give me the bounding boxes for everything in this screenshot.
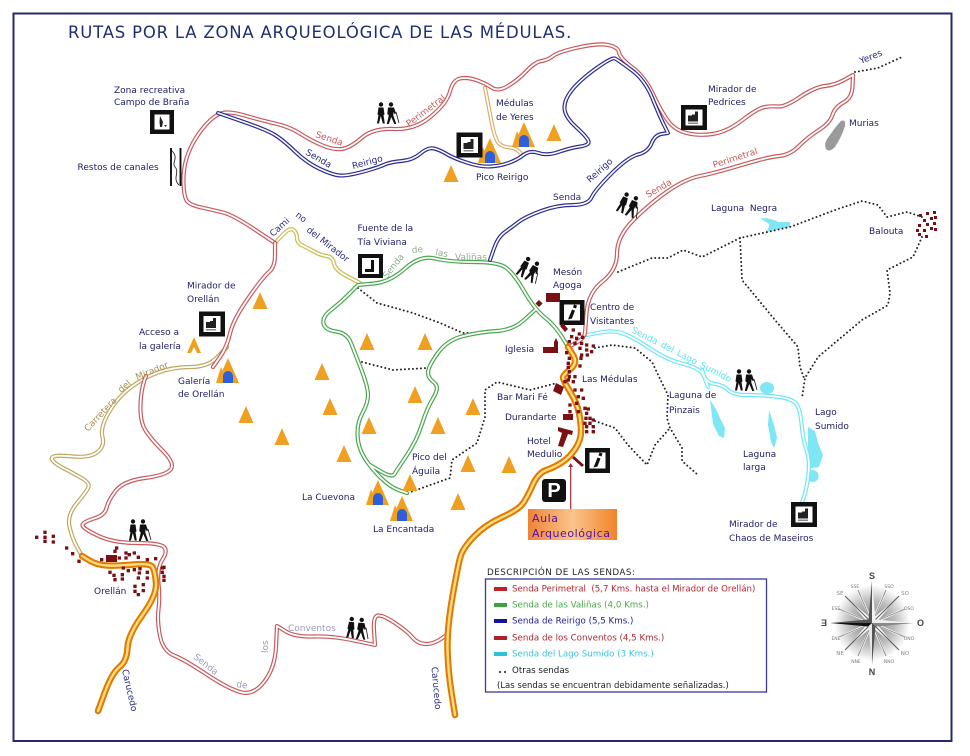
place labels: Balouta <box>869 227 903 237</box>
place labels: de Yeres <box>496 113 534 123</box>
place labels: Pico Reirigo <box>476 173 529 183</box>
place labels: Laguna Negra <box>711 204 777 214</box>
trail: Medulas de Yeres path <box>485 88 522 155</box>
trail labels: Conventos <box>288 624 336 634</box>
place labels: Orellán <box>94 587 126 597</box>
icons: hikers <box>129 102 757 640</box>
trail labels: Senda <box>553 193 581 203</box>
icon: canal remains <box>171 148 180 186</box>
callout: Aula Arqueológica: Aula <box>532 512 558 525</box>
icon: recreation area <box>150 110 174 134</box>
legend heading: DESCRIPCIÓN DE LAS SENDAS: <box>487 566 635 578</box>
place labels: Pico del <box>412 453 447 463</box>
place labels: Las Médulas <box>582 374 638 385</box>
icon: information, visitor centre <box>560 300 584 325</box>
trail labels: Carucedo <box>119 668 139 713</box>
trail labels: Mirador <box>134 361 170 383</box>
place labels: Orellán <box>187 295 219 305</box>
trail labels: de <box>411 245 424 256</box>
compass rose: NNE <box>851 659 861 665</box>
icon: mirador Pico Reirigo <box>456 132 482 158</box>
legend box <box>486 579 766 692</box>
place labels: Pedrices <box>708 98 746 108</box>
trail labels: Valiñas <box>455 253 487 263</box>
icon: mirador de Orellán <box>199 312 225 336</box>
place labels: Hotel <box>527 437 551 447</box>
compass rose: ENE <box>831 636 841 642</box>
trail: Senda de las Valiñas <box>323 258 568 493</box>
compass rose <box>821 571 924 677</box>
trail labels: los <box>261 640 271 653</box>
trail: Senda de Reirigo <box>218 58 668 260</box>
place labels: Acceso a <box>139 328 179 338</box>
place labels: Pinzais <box>669 406 700 416</box>
trail labels: Senda <box>381 252 407 281</box>
village dots: Orellán <box>35 531 166 596</box>
place labels: Mirador de <box>729 520 778 530</box>
galleries <box>216 122 535 521</box>
trail labels: Carretera <box>83 396 119 434</box>
road to Carucedo from Orellán <box>82 556 156 711</box>
legend box: Otras sendas <box>512 666 570 676</box>
trail labels: Senda del Lago Sumido <box>630 326 733 385</box>
icon: parking <box>542 479 566 502</box>
trail labels: del Mirador <box>304 225 351 265</box>
place labels: Iglesia <box>505 345 534 355</box>
trail: Senda del Lago Sumido <box>587 331 809 503</box>
compass rose: SO <box>901 591 910 597</box>
trail labels: del <box>117 379 133 395</box>
place labels: Mirador de <box>187 282 236 292</box>
callout: Aula Arqueológica <box>528 509 617 540</box>
place labels: Visitantes <box>590 317 634 327</box>
place labels: Medulio <box>527 450 563 460</box>
arrow: Aula Arqueológica pointer <box>568 463 573 509</box>
place labels: Lago <box>815 408 837 418</box>
compass rose: ESE <box>832 606 840 612</box>
buildings <box>106 293 584 562</box>
place labels: Águila <box>412 465 440 477</box>
legend box: Senda de las Valiñas (4,0 Kms.) <box>512 600 649 610</box>
place labels: Laguna <box>743 450 776 460</box>
trail labels: Reirigo <box>351 154 384 172</box>
legend box: Senda de los Conventos (4,5 Kms.) <box>512 634 664 644</box>
place labels: Mesón <box>553 267 582 278</box>
trail labels: las <box>434 248 449 260</box>
trail labels: Senda <box>644 178 674 201</box>
compass rose: S <box>869 571 875 581</box>
place labels: Mirador de <box>708 85 757 95</box>
hill: Murias <box>825 121 845 151</box>
place labels: Chaos de Maseiros <box>729 534 814 544</box>
place labels: Médulas <box>496 98 534 109</box>
legend box: (Las sendas se encuentran debidamente señalizadas.) <box>497 681 729 691</box>
place labels: La Cuevona <box>302 493 355 503</box>
legend box: Senda del Lago Sumido (3 Kms.) <box>512 650 654 660</box>
icon: information, south <box>585 448 610 473</box>
place labels: Campo de Braña <box>114 98 189 108</box>
place labels: Tía Viviana <box>356 238 407 248</box>
place labels: de Orellán <box>178 390 224 400</box>
compass rose: SE <box>837 591 844 597</box>
icon: mirador Chaos de Maseiros <box>791 502 817 527</box>
compass rose: OSO <box>904 606 914 612</box>
trail labels: Reirigo <box>585 157 616 185</box>
trail: Senda Perimetral <box>183 44 853 367</box>
compass rose: NE <box>836 651 844 657</box>
compass rose: NO <box>901 651 910 657</box>
place labels: Durandarte <box>505 413 557 423</box>
place labels: Agoga <box>553 281 582 291</box>
place labels: la galería <box>139 342 181 352</box>
trail: Carretera del Mirador <box>52 347 227 556</box>
compass rose: N <box>869 667 875 677</box>
mountain markers <box>238 124 562 510</box>
place labels: larga <box>743 463 766 473</box>
compass rose: NNO <box>884 659 895 665</box>
village dots: Las Médulas <box>563 328 595 433</box>
place labels <box>78 85 903 597</box>
legend box: Senda de Reirigo (5,5 Kms.) <box>512 616 633 626</box>
trail labels: de <box>236 680 249 692</box>
place labels: Sumido <box>815 422 849 432</box>
trail labels: Perimetral <box>712 147 759 171</box>
trail labels <box>83 49 884 713</box>
trail labels: Cami <box>268 216 292 239</box>
water bodies <box>710 218 823 482</box>
compass rose: E <box>821 618 827 628</box>
trail labels: Perimetral <box>405 93 448 129</box>
compass rose: ONO <box>904 636 915 642</box>
legend box: Senda Perimetral (5,7 Kms. hasta el Mirador de Orellán) <box>512 584 755 594</box>
trail labels: Senda <box>191 652 220 678</box>
place labels: La Encantada <box>373 525 434 535</box>
trail: Senda de los Conventos <box>82 376 445 693</box>
place labels: Zona recreativa <box>114 86 185 96</box>
place labels: Centro de <box>590 303 635 313</box>
other trails, dotted <box>358 57 922 493</box>
place labels: Fuente de la <box>358 224 413 234</box>
place labels: Restos de canales <box>78 163 159 173</box>
icon: gallery access <box>187 337 201 353</box>
village dots: Balouta <box>916 211 937 238</box>
icon: parking: P <box>547 480 561 502</box>
icon: mirador de Pedrices <box>681 105 707 130</box>
trail labels: Yeres <box>857 49 884 67</box>
trail labels: Senda <box>314 130 344 149</box>
trail: Camino del Mirador <box>275 229 360 283</box>
place labels: Galería <box>178 377 210 387</box>
icon: fountain <box>358 254 383 278</box>
road to Carucedo from Las Médulas <box>447 347 581 715</box>
compass rose: O <box>917 618 924 628</box>
place labels: Bar Mari Fé <box>497 392 548 403</box>
place labels: Murias <box>849 119 879 129</box>
title: RUTAS POR LA ZONA ARQUEOLÓGICA DE LAS MÉDULAS. <box>68 23 572 42</box>
compass rose: SSO <box>884 584 894 590</box>
callout: Aula Arqueológica: Arqueológica <box>532 527 611 540</box>
trail labels: Carucedo <box>429 666 442 710</box>
compass rose: SSE <box>851 584 859 590</box>
trail labels: Senda <box>304 148 333 171</box>
place labels: Laguna de <box>669 391 717 401</box>
trail labels: no <box>293 210 309 226</box>
